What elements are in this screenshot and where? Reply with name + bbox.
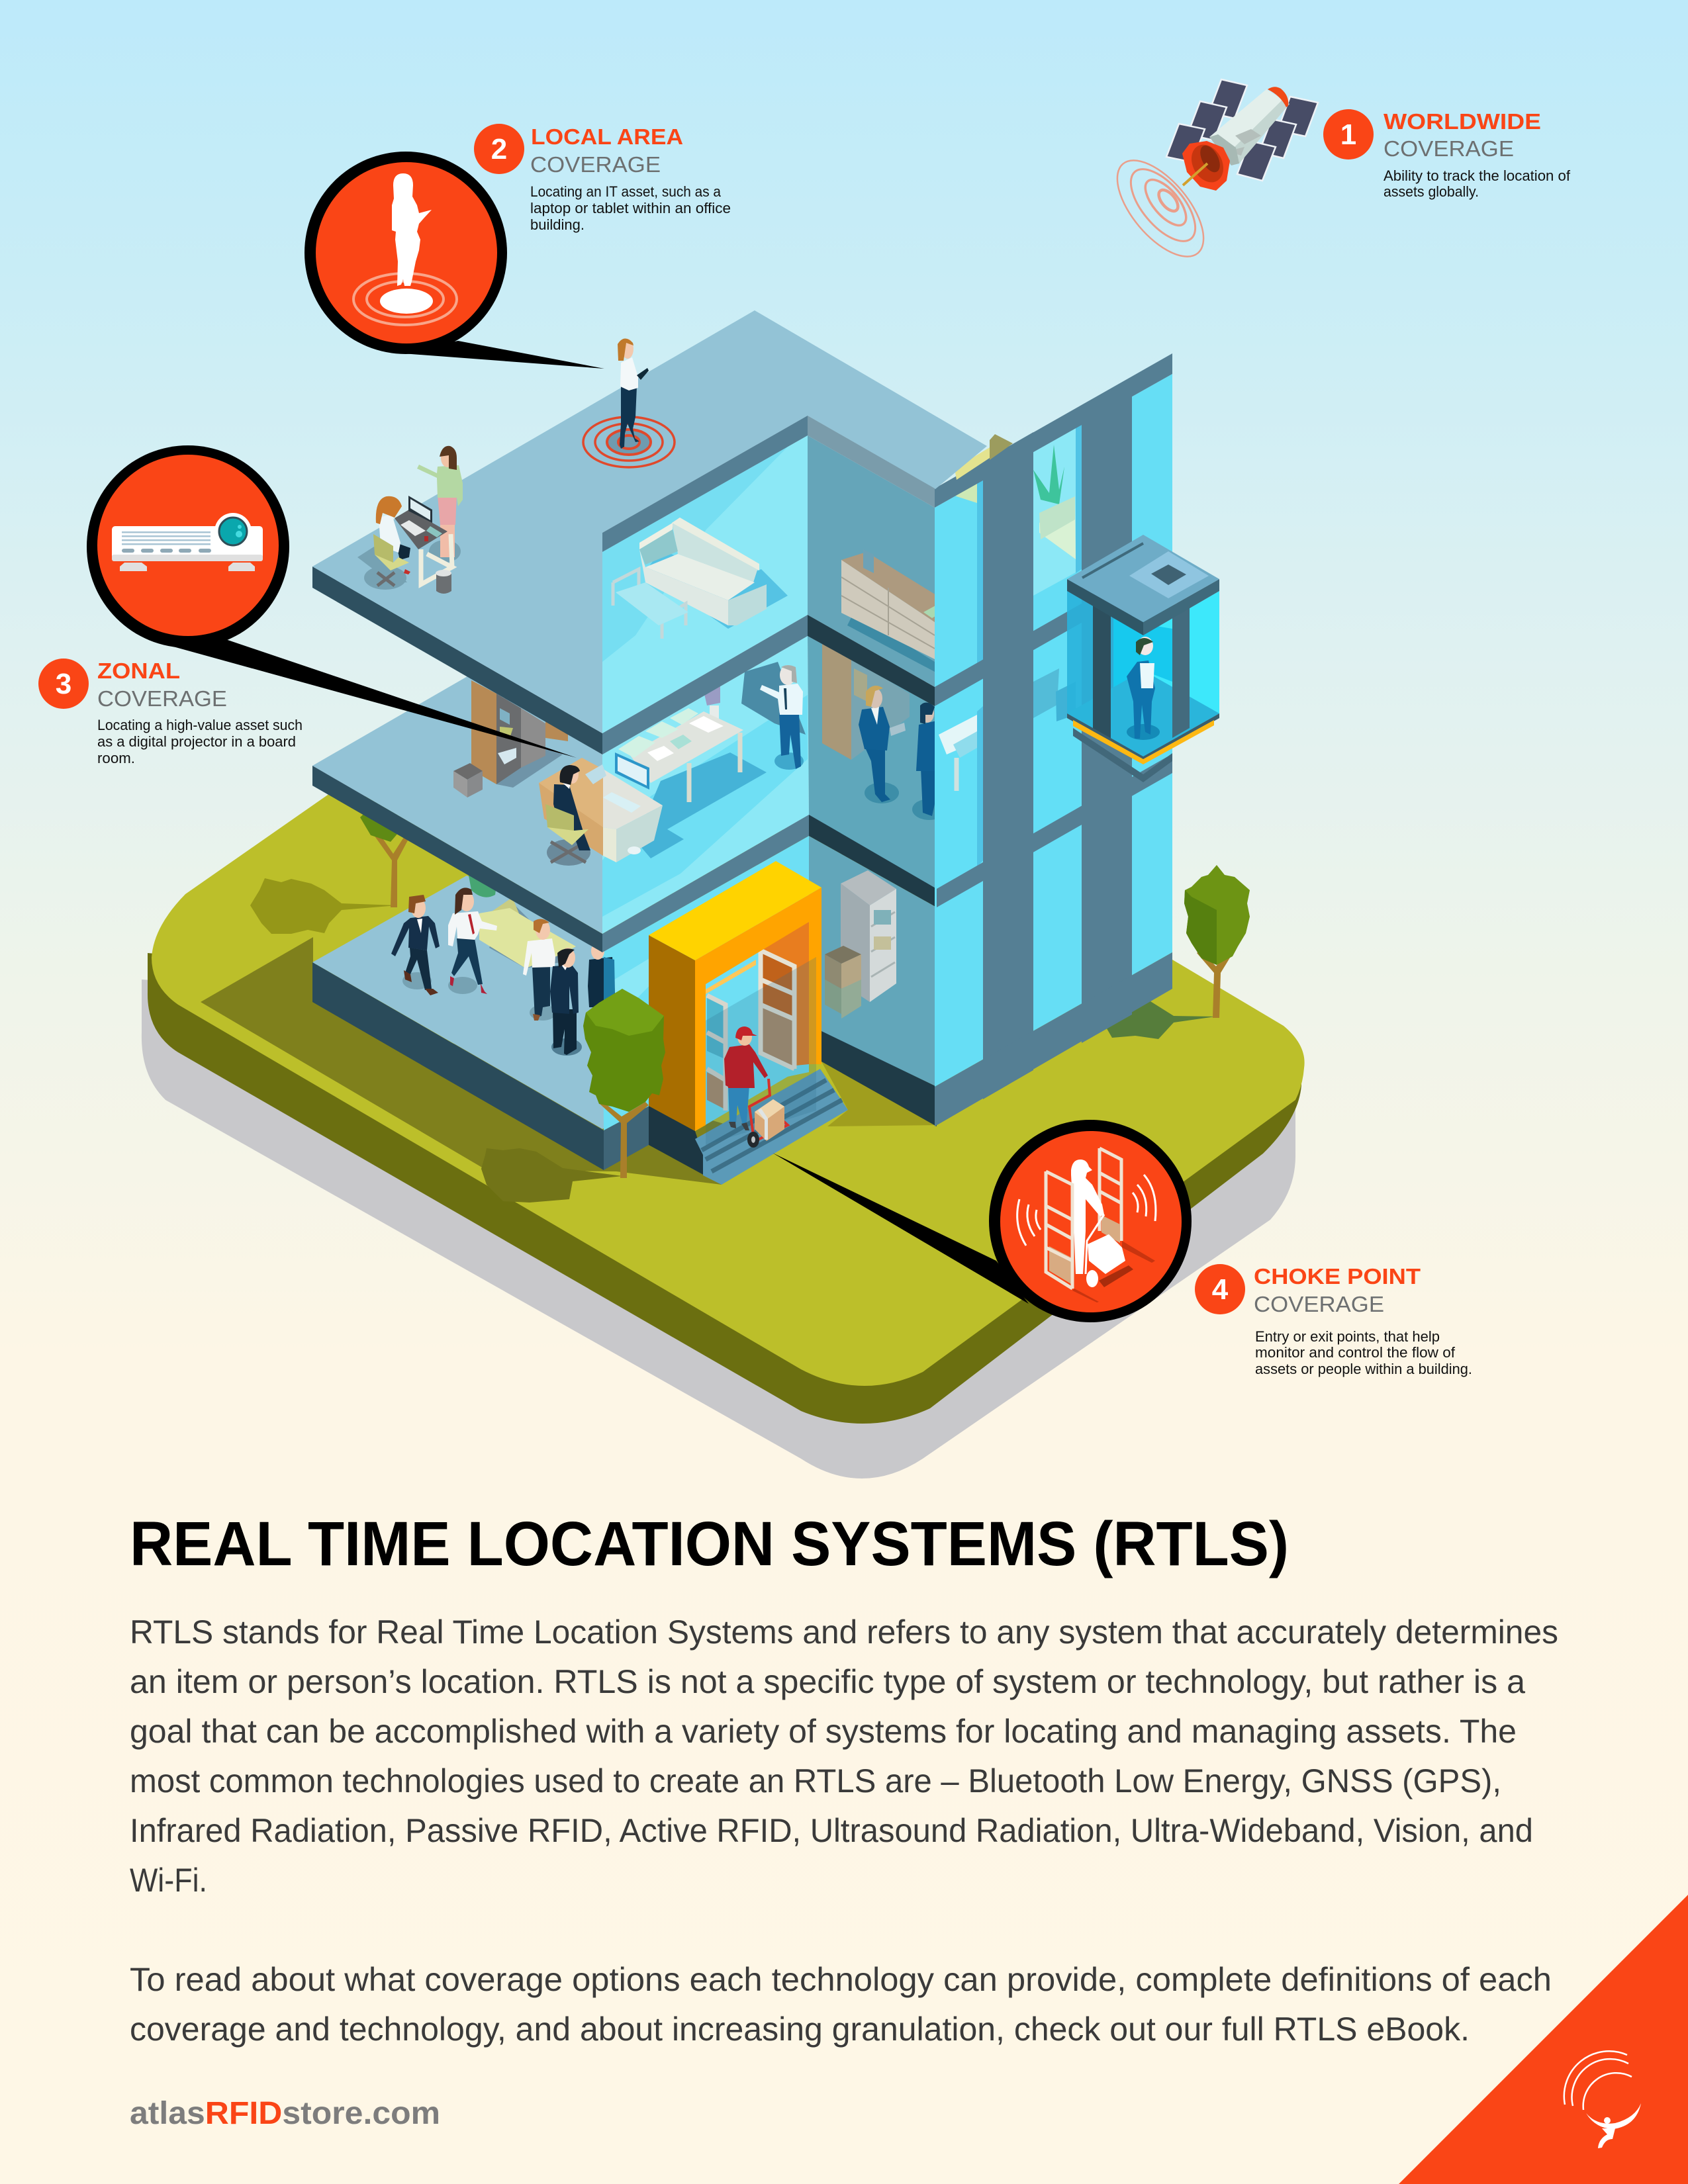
callout 4: choke point coverage: 4 xyxy=(1212,1273,1229,1306)
shadow under elevator xyxy=(1073,728,1172,782)
man listening xyxy=(912,702,947,820)
tree shadows front xyxy=(481,994,1215,1203)
foreground tree xyxy=(583,989,665,1178)
callout 1: worldwide coverage: COVERAGE xyxy=(1383,136,1514,161)
back tree and tree shadow xyxy=(250,797,409,934)
desk xyxy=(395,496,452,584)
woman with tablet on roof xyxy=(618,338,649,449)
roof office group xyxy=(357,446,463,594)
callout 4: choke point coverage xyxy=(773,1120,1472,1377)
elevator back wall xyxy=(1113,619,1172,688)
roof groove xyxy=(1082,543,1143,578)
description: assets globally. xyxy=(1383,183,1479,200)
body paragraph 2 xyxy=(130,1961,1552,2048)
chair seat xyxy=(545,804,574,839)
description xyxy=(530,183,731,233)
top floor glass wall xyxy=(602,435,808,733)
waste bin xyxy=(453,763,483,797)
column 1 xyxy=(983,432,1033,1099)
sofa xyxy=(639,518,767,625)
heading: CHOKE POINT xyxy=(1254,1264,1421,1289)
body paragraph 1 xyxy=(130,1614,1558,1899)
right facade xyxy=(935,353,1172,1126)
books xyxy=(585,764,606,784)
description xyxy=(97,717,303,766)
sofa shadow xyxy=(645,549,788,629)
woman in elevator xyxy=(1127,637,1160,740)
magnifier bubble xyxy=(87,445,577,758)
building shadow on lawn xyxy=(201,937,728,1185)
door frame front xyxy=(695,887,821,1131)
door interior xyxy=(695,922,809,1131)
elevator floor xyxy=(1067,670,1219,756)
elevator floor edge xyxy=(1067,713,1219,761)
person walking 2 xyxy=(448,887,497,994)
plant xyxy=(469,876,498,897)
seated woman xyxy=(376,496,410,574)
tan tip of second floor slab edge xyxy=(312,766,602,952)
base disc xyxy=(380,289,433,314)
small sofa far pane xyxy=(945,470,977,503)
radio rings on roof xyxy=(583,417,675,467)
body paragraph 1: RTLS stands for Real Time Location Systems and refers to any system that accurately determines xyxy=(130,1614,1558,1651)
right gate xyxy=(759,949,796,1069)
body paragraph 1: Infrared Radiation, Passive RFID, Active RFID, Ultrasound Radiation, Ultra-Wideband, Vision, and xyxy=(130,1812,1533,1849)
bookcase and wall shelf xyxy=(822,644,910,760)
description: building. xyxy=(530,216,585,233)
shelf xyxy=(841,870,896,1002)
number badge 3 xyxy=(38,659,89,709)
coffee table xyxy=(613,569,688,639)
lawn xyxy=(152,794,1305,1386)
second floor xyxy=(312,676,602,952)
elevator roof top xyxy=(1067,535,1219,622)
second floor dark slab xyxy=(602,615,935,754)
person walking 1 xyxy=(391,895,440,995)
description: monitor and control the flow of xyxy=(1255,1344,1456,1361)
right gate xyxy=(1100,1148,1121,1241)
platform side xyxy=(148,953,1301,1424)
footer website: atlasRFIDstore.com xyxy=(130,2096,440,2131)
desk left xyxy=(539,758,603,827)
elevator right column xyxy=(1172,608,1190,738)
person walking 4 xyxy=(550,948,582,1056)
desk right xyxy=(603,769,663,829)
number badge 1 xyxy=(1323,109,1374,159)
description: Ability to track the location of xyxy=(1383,167,1571,184)
callout 4: choke point coverage: COVERAGE xyxy=(1254,1292,1384,1316)
person walking 3 xyxy=(523,919,556,1021)
dish xyxy=(1182,141,1230,191)
person silhouette xyxy=(1071,1160,1104,1274)
collar xyxy=(1209,134,1239,165)
body paragraph 1: goal that can be accomplished with a variety of systems for locating and managing assets. The xyxy=(130,1713,1517,1750)
ground floor terrace xyxy=(312,876,662,1170)
second floor surface xyxy=(312,676,602,934)
ground floor edge xyxy=(312,962,604,1170)
description: assets or people within a building. xyxy=(1255,1361,1472,1377)
left gate xyxy=(1049,1246,1071,1284)
glass wall second floor xyxy=(602,636,809,934)
board room table xyxy=(618,708,743,802)
icon: satellite xyxy=(1102,79,1318,271)
facade top band xyxy=(935,353,1172,508)
desk with computer xyxy=(539,752,663,866)
pane interior top floor xyxy=(945,416,1082,867)
slab edge left xyxy=(312,567,602,754)
woman behind table xyxy=(703,683,720,721)
heading: LOCAL AREA xyxy=(531,124,683,149)
description: Locating an IT asset, such as a xyxy=(530,183,722,200)
delivery person xyxy=(724,1026,768,1130)
satellite body xyxy=(1209,89,1289,163)
monitor xyxy=(615,752,649,790)
person walking 5 xyxy=(588,942,615,1007)
description: laptop or tablet within an office xyxy=(530,200,731,216)
floor shadows xyxy=(1122,1241,1155,1263)
floor shadow under table xyxy=(635,752,767,858)
right tree xyxy=(1184,865,1250,1018)
presentation board xyxy=(741,662,806,735)
standing woman xyxy=(417,446,463,557)
lounge sofa xyxy=(479,897,576,968)
right signal waves xyxy=(1133,1175,1156,1221)
callout 3: zonal coverage xyxy=(38,445,577,766)
ground platform xyxy=(142,794,1305,1479)
roof inner right band xyxy=(808,416,935,508)
mid bands xyxy=(935,552,1172,706)
roof hatch xyxy=(1129,551,1209,598)
platform shadow xyxy=(142,979,1295,1479)
description xyxy=(1383,167,1571,200)
top floor interior xyxy=(602,435,959,733)
callout 2: local area coverage xyxy=(305,124,731,369)
glass wall ground floor xyxy=(602,836,809,1130)
corner triangle xyxy=(1399,1895,1688,2184)
cabinets xyxy=(841,549,959,672)
logo xyxy=(1564,2051,1641,2148)
interior wall ground floor xyxy=(809,836,937,1126)
interior wall top floor xyxy=(808,435,935,687)
callout 2: local area coverage: COVERAGE xyxy=(530,152,661,177)
office chair xyxy=(547,839,590,866)
title: REAL TIME LOCATION SYSTEMS (RTLS) xyxy=(130,1509,1289,1579)
door frame side xyxy=(649,935,695,1131)
presenter xyxy=(760,665,804,770)
shadows xyxy=(357,547,407,582)
description xyxy=(1255,1328,1472,1377)
keyboard xyxy=(603,792,641,813)
magnifier bubble xyxy=(305,152,604,369)
body connectors xyxy=(1235,129,1261,156)
glass left xyxy=(1067,591,1143,756)
glass right xyxy=(1143,591,1219,756)
man with tablet xyxy=(859,686,906,803)
description: Entry or exit points, that help xyxy=(1255,1328,1440,1345)
yellow sofa behind roof xyxy=(955,434,1013,480)
body paragraph 1: most common technologies used to create an RTLS are – Bluetooth Low Energy, GNSS (GPS), xyxy=(130,1762,1501,1799)
description: as a digital projector in a board xyxy=(97,733,296,750)
furniture far pane second floor xyxy=(1033,668,1076,721)
stairs xyxy=(695,1069,848,1185)
stairs base xyxy=(649,1106,722,1185)
ground floor surface xyxy=(312,876,662,1129)
description: Locating a high-value asset such xyxy=(97,717,303,733)
callout 3: zonal coverage: 3 xyxy=(56,668,71,700)
desk seen through near pane xyxy=(939,715,977,791)
terrace roof xyxy=(312,310,1013,754)
door frame top xyxy=(649,861,821,960)
glass tint across doorway xyxy=(706,957,816,1145)
roof inner left band xyxy=(602,416,808,552)
callout 2: local area coverage: 2 xyxy=(491,133,507,165)
sofa in pane xyxy=(1039,498,1076,559)
top cap xyxy=(1268,87,1288,107)
entrance with gate and stairs xyxy=(649,861,848,1185)
facade glass xyxy=(935,374,1172,1087)
roof top xyxy=(312,310,987,733)
hand truck and box xyxy=(747,1079,788,1148)
antenna xyxy=(1183,163,1207,185)
callout 3: zonal coverage: COVERAGE xyxy=(97,686,227,711)
icon: projector xyxy=(112,513,263,571)
waste bin xyxy=(436,570,451,594)
heading: ZONAL xyxy=(97,659,180,683)
ground floor ceiling slab xyxy=(602,815,937,952)
number badge 2 xyxy=(474,124,524,174)
callout 1: worldwide coverage xyxy=(1102,79,1571,271)
callout 1: worldwide coverage: 1 xyxy=(1340,118,1356,151)
magnifier bubble xyxy=(773,1120,1192,1322)
description: room. xyxy=(97,750,135,766)
hand truck and box xyxy=(1088,1234,1125,1274)
number badge 4 xyxy=(1195,1264,1245,1314)
chair xyxy=(373,534,409,586)
boxes xyxy=(825,946,861,1019)
icon: woman silhouette xyxy=(392,173,432,286)
heading: WORLDWIDE xyxy=(1383,109,1541,134)
bookcase xyxy=(471,680,568,788)
plant xyxy=(1033,445,1064,504)
left gate xyxy=(707,995,726,1111)
column 2 xyxy=(1082,377,1132,1043)
solar panels xyxy=(1166,79,1318,181)
body paragraph 2: coverage and technology, and about increasing granulation, check out our full RTLS eBook. xyxy=(130,2011,1470,2048)
icon: RFID gate and person xyxy=(1017,1148,1156,1302)
shadow beside stairs xyxy=(821,1062,937,1126)
elevator left column xyxy=(1093,599,1111,741)
interior transom xyxy=(706,960,756,994)
elevator roof sides xyxy=(1067,579,1143,635)
rings xyxy=(353,273,457,325)
signal rings xyxy=(1102,146,1219,271)
interior wall second floor xyxy=(808,636,947,889)
trash xyxy=(628,846,641,854)
left signal waves xyxy=(1017,1199,1041,1246)
yellow trim xyxy=(1073,720,1214,764)
door reveal xyxy=(763,922,809,1066)
body paragraph 2: To read about what coverage options each technology can provide, complete definitions of each xyxy=(130,1961,1552,1998)
body paragraph 1: Wi-Fi. xyxy=(130,1862,207,1899)
seated man xyxy=(553,765,590,850)
body paragraph 1: an item or person’s location. RTLS is not a specific type of system or technology, but rather is a xyxy=(130,1663,1525,1700)
base band xyxy=(935,952,1172,1126)
elevator xyxy=(1067,535,1219,782)
